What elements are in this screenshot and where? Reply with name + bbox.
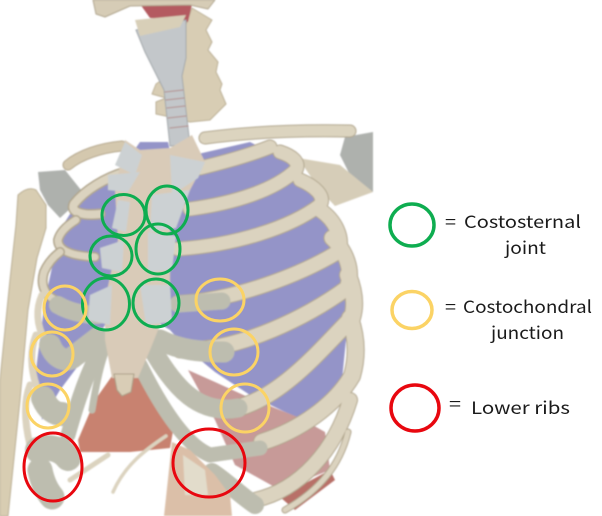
annotation circles: lower ribs: [24, 429, 245, 501]
equals sign: =: [445, 293, 456, 318]
lumbar vertebra: [183, 455, 208, 495]
label junction: junction: [490, 319, 564, 344]
abdominal spine: [164, 442, 232, 516]
thyroid cartilage top: [135, 15, 186, 36]
right scapula: [298, 158, 373, 206]
right shoulder joint: [340, 132, 373, 192]
left ribs: [26, 172, 125, 445]
left humerus: [0, 189, 46, 516]
legend circle yellow: [392, 292, 432, 328]
lungs: [36, 142, 348, 425]
floating rib: [113, 436, 166, 492]
sternum: [105, 135, 205, 378]
trachea and larynx: [136, 20, 190, 146]
left costal cartilage: [38, 305, 106, 497]
larynx muscle: [140, 0, 193, 22]
cervical vertebrae: [152, 8, 226, 122]
diaphragm muscle centre: [78, 372, 175, 452]
ribs right: [178, 147, 356, 510]
mandible bone: [93, 0, 215, 17]
annotation circles: costosternal joints: [82, 186, 188, 330]
diaphragm muscle right: [188, 370, 330, 490]
anatomy illustration: [0, 0, 373, 516]
label joint: joint: [504, 234, 547, 259]
equals sign: =: [445, 208, 456, 233]
sternal cartilage wraps: [88, 142, 205, 325]
label costochondral: Costochondral: [463, 293, 592, 318]
annotation circles: costochondral junctions: [27, 279, 269, 432]
lower floating rib: [70, 455, 108, 480]
equals sign: =: [449, 390, 461, 415]
xiphoid process: [114, 374, 134, 396]
clavicles: [68, 131, 350, 165]
right costal cartilage: [140, 301, 260, 505]
legend: lower ribs: [391, 385, 570, 431]
legend: costochondral junction: [392, 292, 592, 344]
label costosternal: Costosternal: [464, 208, 581, 233]
label lower ribs: Lower ribs: [471, 394, 570, 419]
left shoulder joint: [38, 170, 85, 218]
lower right muscle: [280, 470, 335, 510]
tracheal rings: [165, 90, 188, 128]
legend circle green: [390, 204, 434, 246]
legend: costosternal joint: [390, 204, 581, 259]
legend circle red: [391, 385, 439, 431]
